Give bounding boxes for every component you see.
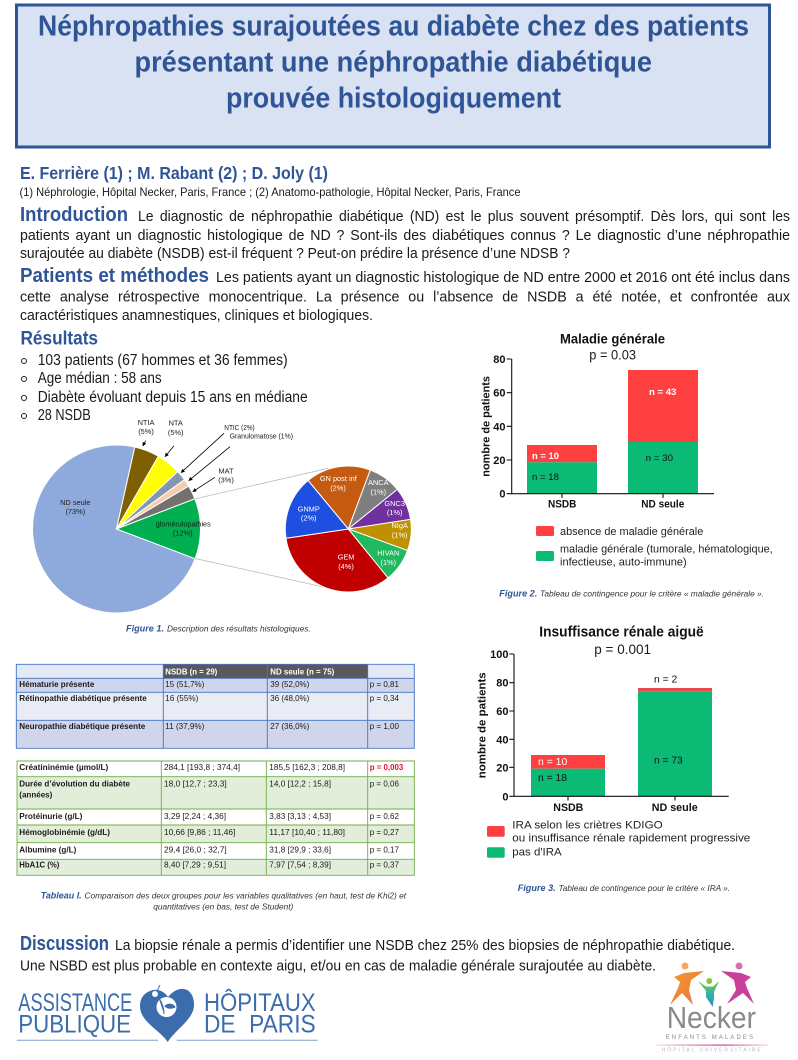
section: patients et méthodes: caractéristiques anamnestiques, cliniques et biologiques. xyxy=(20,308,373,324)
section: patients et méthodes: cette analyse rétrospective monocentrique. La présence ou l’absence de NSDB a été notée, et confrontée aux xyxy=(20,290,791,306)
table: qualitative variables: 16 (55%) xyxy=(165,693,198,703)
table: quantitative variables xyxy=(17,761,414,875)
table: quantitative variables: p = 0,27 xyxy=(370,827,399,837)
legend: IRA xyxy=(487,819,750,859)
chart: insuffisance rénale aiguë: n = 2 xyxy=(654,674,677,686)
pie labels: Granulomatose (1%) xyxy=(230,432,293,441)
table: qualitative variables: NSDB (n = 29) xyxy=(165,666,217,676)
figure 2 caption: Figure 2. xyxy=(499,588,537,599)
chart: maladie générale: NSDB xyxy=(548,499,576,511)
legend: maladie générale: absence de maladie générale xyxy=(560,526,703,538)
chart: maladie générale: n = 10 xyxy=(532,451,559,462)
section: patients et méthodes xyxy=(20,265,791,324)
chart: insuffisance rénale aiguë: n = 73 xyxy=(654,754,683,766)
chart: insuffisance rénale aiguë: 0 xyxy=(502,791,508,803)
legend: IRA: IRA selon les criètres KDIGO xyxy=(512,819,663,831)
table: quantitative variables: p = 0,003 xyxy=(370,762,403,772)
chart: insuffisance rénale aiguë: n = 10 xyxy=(538,756,567,768)
chart: maladie générale: 40 xyxy=(493,421,506,433)
section: résultats list xyxy=(20,328,308,424)
chart: maladie générale: ND seule xyxy=(641,499,684,511)
table: quantitative variables: 3,29 [2,24 ; 4,36] xyxy=(164,811,226,821)
chart: insuffisance rénale aiguë: nombre de patients xyxy=(476,672,488,778)
title banner: Néphropathies surajoutées au diabète chez des patients xyxy=(38,10,749,42)
chart: maladie générale: 0 xyxy=(499,489,506,501)
table: quantitative variables: Albumine (g/L) xyxy=(19,845,76,855)
logo: assistance publique hôpitaux de paris: PUBLIQUE xyxy=(18,1010,131,1038)
section: discussion xyxy=(20,933,735,975)
logo: necker enfants malades: HÔPITAL UNIVERSITAIRE xyxy=(662,1047,761,1054)
table: quantitative variables: 8,40 [7,29 ; 9,51] xyxy=(164,860,226,870)
pie labels: (1%) xyxy=(387,508,403,517)
table: quantitative variables: 14,0 [12,2 ; 15,8] xyxy=(269,779,331,789)
chart: maladie générale: 20 xyxy=(493,455,506,467)
authors: E. Ferrière (1) ; M. Rabant (2) ; D. Joly (1) xyxy=(20,163,328,183)
chart: maladie générale: Maladie générale xyxy=(560,331,665,346)
pie labels: ANCA xyxy=(368,478,389,487)
table: quantitative variables: Créatininémie (µmol/L) xyxy=(19,762,108,772)
legend: maladie générale: maladie générale (tumorale, hématologique, xyxy=(560,544,773,556)
section: introduction: Le diagnostic de néphropathie diabétique (ND) est le plus souvent présomptif. Dès lors, qui sont les xyxy=(138,209,790,225)
figure 1 caption: Description des résultats histologiques. xyxy=(167,625,311,634)
table: qualitative variables: 39 (52,0%) xyxy=(270,679,309,689)
table: qualitative variables: 36 (48,0%) xyxy=(270,693,309,703)
table: quantitative variables: p = 0,37 xyxy=(370,860,399,870)
pie labels: HIVAN xyxy=(377,549,399,558)
chart: main histology pie xyxy=(33,445,201,613)
section: résultats list: 28 NSDB xyxy=(38,407,91,424)
title banner: présentant une néphropathie diabétique xyxy=(134,46,652,78)
table: qualitative variables xyxy=(16,664,414,748)
table: qualitative variables: Hématurie présente xyxy=(19,679,94,689)
logo: assistance publique hôpitaux de paris: DE PARIS xyxy=(204,1010,316,1038)
authors: (1) Néphrologie, Hôpital Necker, Paris, France ; (2) Anatomo-pathologie, Hôpital Necker, Paris, France xyxy=(20,185,521,199)
logo: necker enfants malades: Necker xyxy=(667,1000,756,1035)
pie labels: glomérulopathies xyxy=(156,520,211,529)
pie labels: NIgA xyxy=(391,521,408,530)
chart: insuffisance rénale aiguë: 100 xyxy=(490,649,508,661)
chart: insuffisance rénale aiguë: 80 xyxy=(496,678,508,690)
table: quantitative variables: 18,0 [12,7 ; 23,3] xyxy=(164,779,227,789)
section: résultats list: Age médian : 58 ans xyxy=(38,370,162,387)
pie labels: GNMP xyxy=(298,504,320,513)
table: qualitative variables: 27 (36,0%) xyxy=(270,721,309,731)
pie arrows xyxy=(143,433,230,492)
legend: maladie générale: infectieuse, auto-immune) xyxy=(560,557,687,569)
chart: insuffisance rénale aiguë: n = 18 xyxy=(538,772,567,784)
section: introduction: patients ayant un diagnostic histologique de ND ? Sont-ils des diabétiques connus ? Le diagnostic d’une néphropathie xyxy=(20,228,790,244)
table: qualitative variables: Neuropathie diabétique présente xyxy=(19,721,145,731)
section: discussion: Discussion xyxy=(20,933,109,955)
chart: insuffisance rénale aiguë xyxy=(476,625,750,859)
logo: necker enfants malades xyxy=(657,962,768,1054)
table: quantitative variables: (années) xyxy=(19,789,52,799)
pie labels: (2%) xyxy=(301,514,317,523)
table: quantitative variables: 185,5 [162,3 ; 208,8] xyxy=(269,762,345,772)
table: quantitative variables: p = 0,06 xyxy=(370,779,399,789)
pie labels: (5%) xyxy=(138,427,154,436)
figure 2 caption: Tableau de contingence pour le critère « maladie générale ». xyxy=(540,590,764,599)
section: résultats list: Résultats xyxy=(20,328,98,350)
logo: assistance publique hôpitaux de paris: HÔPITAUX xyxy=(204,988,316,1017)
table: qualitative variables: p = 0,81 xyxy=(370,679,399,689)
table: qualitative variables: 11 (37,9%) xyxy=(165,721,204,731)
figure 3 caption xyxy=(518,882,730,893)
chart: insuffisance rénale aiguë: NSDB xyxy=(553,802,583,814)
table: qualitative variables: p = 1,00 xyxy=(370,721,399,731)
pie labels: NTIC (2%) xyxy=(224,423,255,432)
table: qualitative variables: Rétinopathie diabétique présente xyxy=(19,693,147,703)
figure 3 caption: Figure 3. xyxy=(518,882,556,893)
table: quantitative variables: HbA1C (%) xyxy=(19,860,59,870)
chart: maladie générale: 80 xyxy=(493,354,506,366)
table: quantitative variables: p = 0,17 xyxy=(370,845,399,855)
table caption xyxy=(41,889,407,911)
pie labels: (5%) xyxy=(168,428,184,437)
chart: maladie générale: n = 18 xyxy=(532,472,559,483)
chart: maladie générale: n = 30 xyxy=(646,453,673,464)
pie labels: GEM xyxy=(338,553,354,562)
figure 1 caption: Figure 1. xyxy=(126,623,164,634)
table caption: Comparaison des deux groupes pour les variables qualitatives (en haut, test de Khi2) et xyxy=(84,891,407,900)
chart: maladie générale: n = 43 xyxy=(649,387,676,398)
table: quantitative variables: p = 0,62 xyxy=(370,811,399,821)
pie labels: MAT xyxy=(218,467,234,476)
legend: IRA: pas d'IRA xyxy=(512,847,562,859)
logo: assistance publique hôpitaux de paris xyxy=(17,985,318,1042)
table caption: Tableau I. xyxy=(41,889,82,900)
legend: IRA: ou insuffisance rénale rapidement progressive xyxy=(512,833,750,845)
table: quantitative variables: 11,17 [10,40 ; 11,80] xyxy=(269,827,345,837)
table: quantitative variables: Hémoglobinémie (g/dL) xyxy=(19,827,110,837)
section: patients et méthodes: Les patients ayant un diagnostic histologique de ND entre 2000 et 2016 ont été inclus dans xyxy=(216,270,790,286)
chart: maladie générale: p = 0.03 xyxy=(589,347,636,362)
table: quantitative variables: 3,83 [3,13 ; 4,53] xyxy=(269,811,331,821)
title banner xyxy=(16,5,770,147)
pie labels: NTA xyxy=(169,418,183,428)
pie labels: NTIA xyxy=(138,418,154,427)
section: introduction xyxy=(20,204,790,262)
chart: maladie générale: nombre de patients xyxy=(480,376,492,477)
figure 3 caption: Tableau de contingence pour le critère « IRA ». xyxy=(558,884,730,893)
pie labels: (12%) xyxy=(173,529,193,538)
chart: insuffisance rénale aiguë: p = 0.001 xyxy=(594,641,651,657)
pie labels: (73%) xyxy=(65,507,85,516)
logo: assistance publique hôpitaux de paris: ASSISTANCE xyxy=(18,989,132,1017)
section: introduction: Introduction xyxy=(20,204,128,226)
chart: insuffisance rénale aiguë: Insuffisance rénale aiguë xyxy=(539,625,704,641)
section: discussion: La biopsie rénale a permis d’identifier une NSDB chez 25% des biopsies de néphropathie diabétique. xyxy=(115,938,735,954)
table: qualitative variables: p = 0,34 xyxy=(370,693,399,703)
pie labels: (1%) xyxy=(392,531,408,540)
chart: insuffisance rénale aiguë: 40 xyxy=(496,734,508,746)
pie labels: (1%) xyxy=(370,488,386,497)
pie labels: GNC3 xyxy=(384,499,405,508)
table: quantitative variables: Protéinurie (g/L) xyxy=(19,811,82,821)
table: quantitative variables: 29,4 [26,0 ; 32,7] xyxy=(164,845,227,855)
pie labels: ND seule xyxy=(60,498,91,507)
pie labels: (2%) xyxy=(330,484,346,493)
chart: insuffisance rénale aiguë: ND seule xyxy=(652,802,698,814)
connector lines between pies xyxy=(194,468,328,588)
table: qualitative variables: ND seule (n = 75) xyxy=(270,666,334,676)
pie labels xyxy=(60,418,408,571)
legend: maladie générale xyxy=(536,526,773,569)
chart: insuffisance rénale aiguë: 20 xyxy=(496,762,508,774)
section: résultats list: Diabète évoluant depuis 15 ans en médiane xyxy=(38,389,308,406)
pie labels: (1%) xyxy=(380,558,396,567)
table: quantitative variables: Durée d’évolution du diabète xyxy=(19,779,130,789)
section: discussion: Une NSBD est plus probable en contexte aigu, et/ou en cas de maladie générale surajoutée au diabète. xyxy=(20,959,656,975)
section: résultats list: 103 patients (67 hommes et 36 femmes) xyxy=(38,352,288,369)
table: quantitative variables: 7,97 [7,54 ; 8,39] xyxy=(269,860,331,870)
chart: glomerulopathies detail pie xyxy=(285,466,411,592)
chart: maladie générale xyxy=(480,331,773,569)
pie labels: GN post inf xyxy=(320,474,358,483)
section: patients et méthodes: Patients et méthodes xyxy=(20,265,209,287)
chart: insuffisance rénale aiguë: 60 xyxy=(496,706,508,718)
figure 2 caption xyxy=(499,588,764,599)
pie labels: (4%) xyxy=(338,562,354,571)
table: quantitative variables: 10,66 [9,86 ; 11,46] xyxy=(164,827,235,837)
table: quantitative variables: 31,8 [29,9 ; 33,6] xyxy=(269,845,331,855)
figure 1 caption xyxy=(126,623,311,634)
title banner: prouvée histologiquement xyxy=(226,82,561,114)
chart: maladie générale: 60 xyxy=(493,388,506,400)
table caption: quantitatives (en bas, test de Student) xyxy=(153,902,294,911)
logo: necker enfants malades: ENFANTS MALADES xyxy=(666,1035,753,1041)
section: introduction: surajoutée au diabète (NSDB) est-il fréquent ? Peut-on prédire la présence d’une NDSB ? xyxy=(20,246,570,262)
pie labels: (3%) xyxy=(218,476,234,485)
authors xyxy=(20,163,521,199)
table: qualitative variables: 15 (51,7%) xyxy=(165,679,204,689)
table: quantitative variables: 284,1 [193,8 ; 374,4] xyxy=(164,762,240,772)
